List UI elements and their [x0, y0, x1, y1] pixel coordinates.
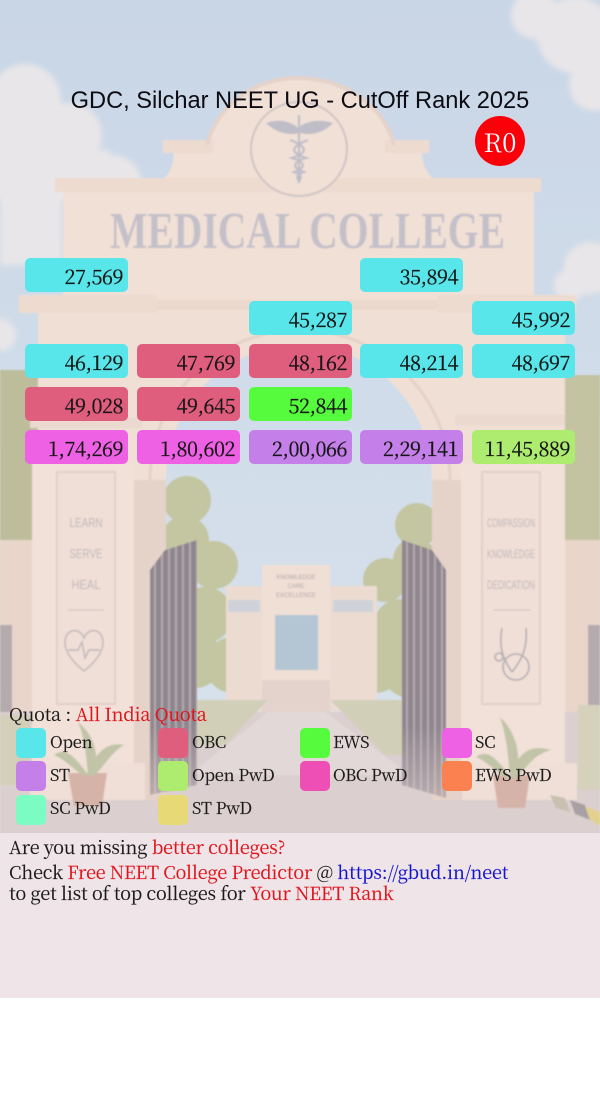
- rank: 48,214 Open: [360, 344, 463, 378]
- rank: 48,162 OBC: 48,162: [288, 347, 347, 376]
- rank: 49,645 OBC: [137, 387, 240, 421]
- rank: 2,29,141 ST: 2,29,141: [383, 433, 458, 462]
- rank: 2,00,066 ST: [249, 430, 352, 464]
- rank: 48,162 OBC: [249, 344, 352, 378]
- round badge: R0: [475, 116, 525, 166]
- iron gates: [150, 540, 446, 798]
- campus building: CARE: [288, 584, 304, 590]
- sky: [0, 0, 600, 840]
- rank: 45,287 Open: [249, 301, 352, 335]
- rank: 48,697 Open: 48,697: [511, 347, 570, 376]
- swatch: Open PwD: [158, 761, 188, 791]
- right pillar: [438, 295, 577, 800]
- right pillar inscription: [487, 516, 535, 680]
- swatch: EWS: [300, 728, 330, 758]
- rank: 27,569 Open: 27,569: [64, 261, 123, 290]
- legend: [16, 728, 552, 825]
- far trees and side buildings: [0, 370, 600, 770]
- rank: 45,287 Open: 45,287: [288, 304, 347, 333]
- rank: 35,894 Open: [360, 258, 463, 292]
- promo line 2: Check Free NEET College Predictor @ https://gbud.in/neet: [9, 859, 508, 885]
- rank: 49,028 OBC: 49,028: [64, 390, 123, 419]
- title: GDC, Silchar NEET UG - CutOff Rank 2025: [71, 88, 529, 114]
- rank: 49,028 OBC: [25, 387, 128, 421]
- rank: 46,129 Open: 46,129: [64, 347, 123, 376]
- rank: 1,80,602 SC: [137, 430, 240, 464]
- rank: 1,80,602 SC: 1,80,602: [160, 433, 235, 462]
- roadside curb: [550, 795, 600, 826]
- background illustration: medical college gate: [0, 0, 600, 833]
- potted plants: [54, 717, 551, 808]
- rank: 47,769 OBC: 47,769: [176, 347, 235, 376]
- round badge: R0: R0: [484, 123, 516, 160]
- label: ST PwD: ST PwD: [192, 795, 252, 819]
- rank: 1,74,269 SC: 1,74,269: [48, 433, 123, 462]
- promo line 3: to get list of top colleges for Your NEET Rank: [9, 880, 394, 906]
- ground and path: [0, 700, 600, 837]
- right pillar inscription: COMPASSION: [487, 516, 535, 530]
- label: ST: ST: [50, 762, 70, 786]
- gate structure: pediment and wall: [55, 78, 541, 305]
- label: SC PwD: SC PwD: [50, 795, 111, 819]
- rank: 47,769 OBC: [137, 344, 240, 378]
- rank: 48,697 Open: [472, 344, 575, 378]
- arch over opening: [134, 300, 461, 800]
- rank: 45,992 Open: [472, 301, 575, 335]
- rank: 2,29,141 ST: [360, 430, 463, 464]
- rank: 49,645 OBC: 49,645: [176, 390, 235, 419]
- rank: 27,569 Open: [25, 258, 128, 292]
- rank: 2,00,066 ST: 2,00,066: [272, 433, 347, 462]
- right pillar inscription: DEDICATION: [487, 578, 535, 592]
- rank: 52,844 EWS: [249, 387, 352, 421]
- promo line 1: Are you missing better colleges?: [9, 834, 285, 860]
- left pillar inscription: [65, 515, 104, 671]
- campus building: KNOWLEDGE: [276, 575, 316, 581]
- left pillar inscription: LEARN: [70, 515, 102, 530]
- label: Open: Open: [50, 729, 92, 753]
- left pillar inscription: SERVE: [70, 546, 103, 561]
- rank: 1,74,269 SC: [25, 430, 128, 464]
- swatch: ST PwD: [158, 795, 188, 825]
- swatch: Open: [16, 728, 46, 758]
- label: EWS PwD: EWS PwD: [475, 762, 552, 786]
- campus building: [226, 565, 377, 712]
- swatch: OBC: [158, 728, 188, 758]
- quota heading: Quota : All India Quota: [9, 701, 207, 727]
- rank: 46,129 Open: [25, 344, 128, 378]
- rank: 45,992 Open: 45,992: [511, 304, 570, 333]
- rank: 48,214 Open: 48,214: [399, 347, 458, 376]
- medallion: caduceus: [251, 102, 347, 196]
- swatch: OBC PwD: [300, 761, 330, 791]
- rank: 11,45,889 Open PwD: 11,45,889: [484, 433, 570, 462]
- campus building: EXCELLENCE: [276, 593, 316, 599]
- label: SC: SC: [475, 729, 495, 753]
- swatch: EWS PwD: [442, 761, 472, 791]
- campus trees: [161, 476, 439, 698]
- right pillar inscription: KNOWLEDGE: [487, 547, 535, 561]
- panel: college predictor promo: [0, 833, 600, 998]
- label: OBC: OBC: [192, 729, 226, 753]
- label: EWS: EWS: [333, 729, 369, 753]
- label: Open PwD: Open PwD: [192, 762, 275, 786]
- left pillar inscription: HEAL: [72, 577, 100, 592]
- left pillar: [19, 295, 157, 800]
- swatch: SC PwD: [16, 795, 46, 825]
- swatch: SC: [442, 728, 472, 758]
- swatch: ST: [16, 761, 46, 791]
- rank: 35,894 Open: 35,894: [399, 261, 458, 290]
- clouds: [0, 0, 600, 351]
- rank grid: [25, 258, 575, 464]
- rank: 52,844 EWS: 52,844: [288, 390, 347, 419]
- label: OBC PwD: OBC PwD: [333, 762, 407, 786]
